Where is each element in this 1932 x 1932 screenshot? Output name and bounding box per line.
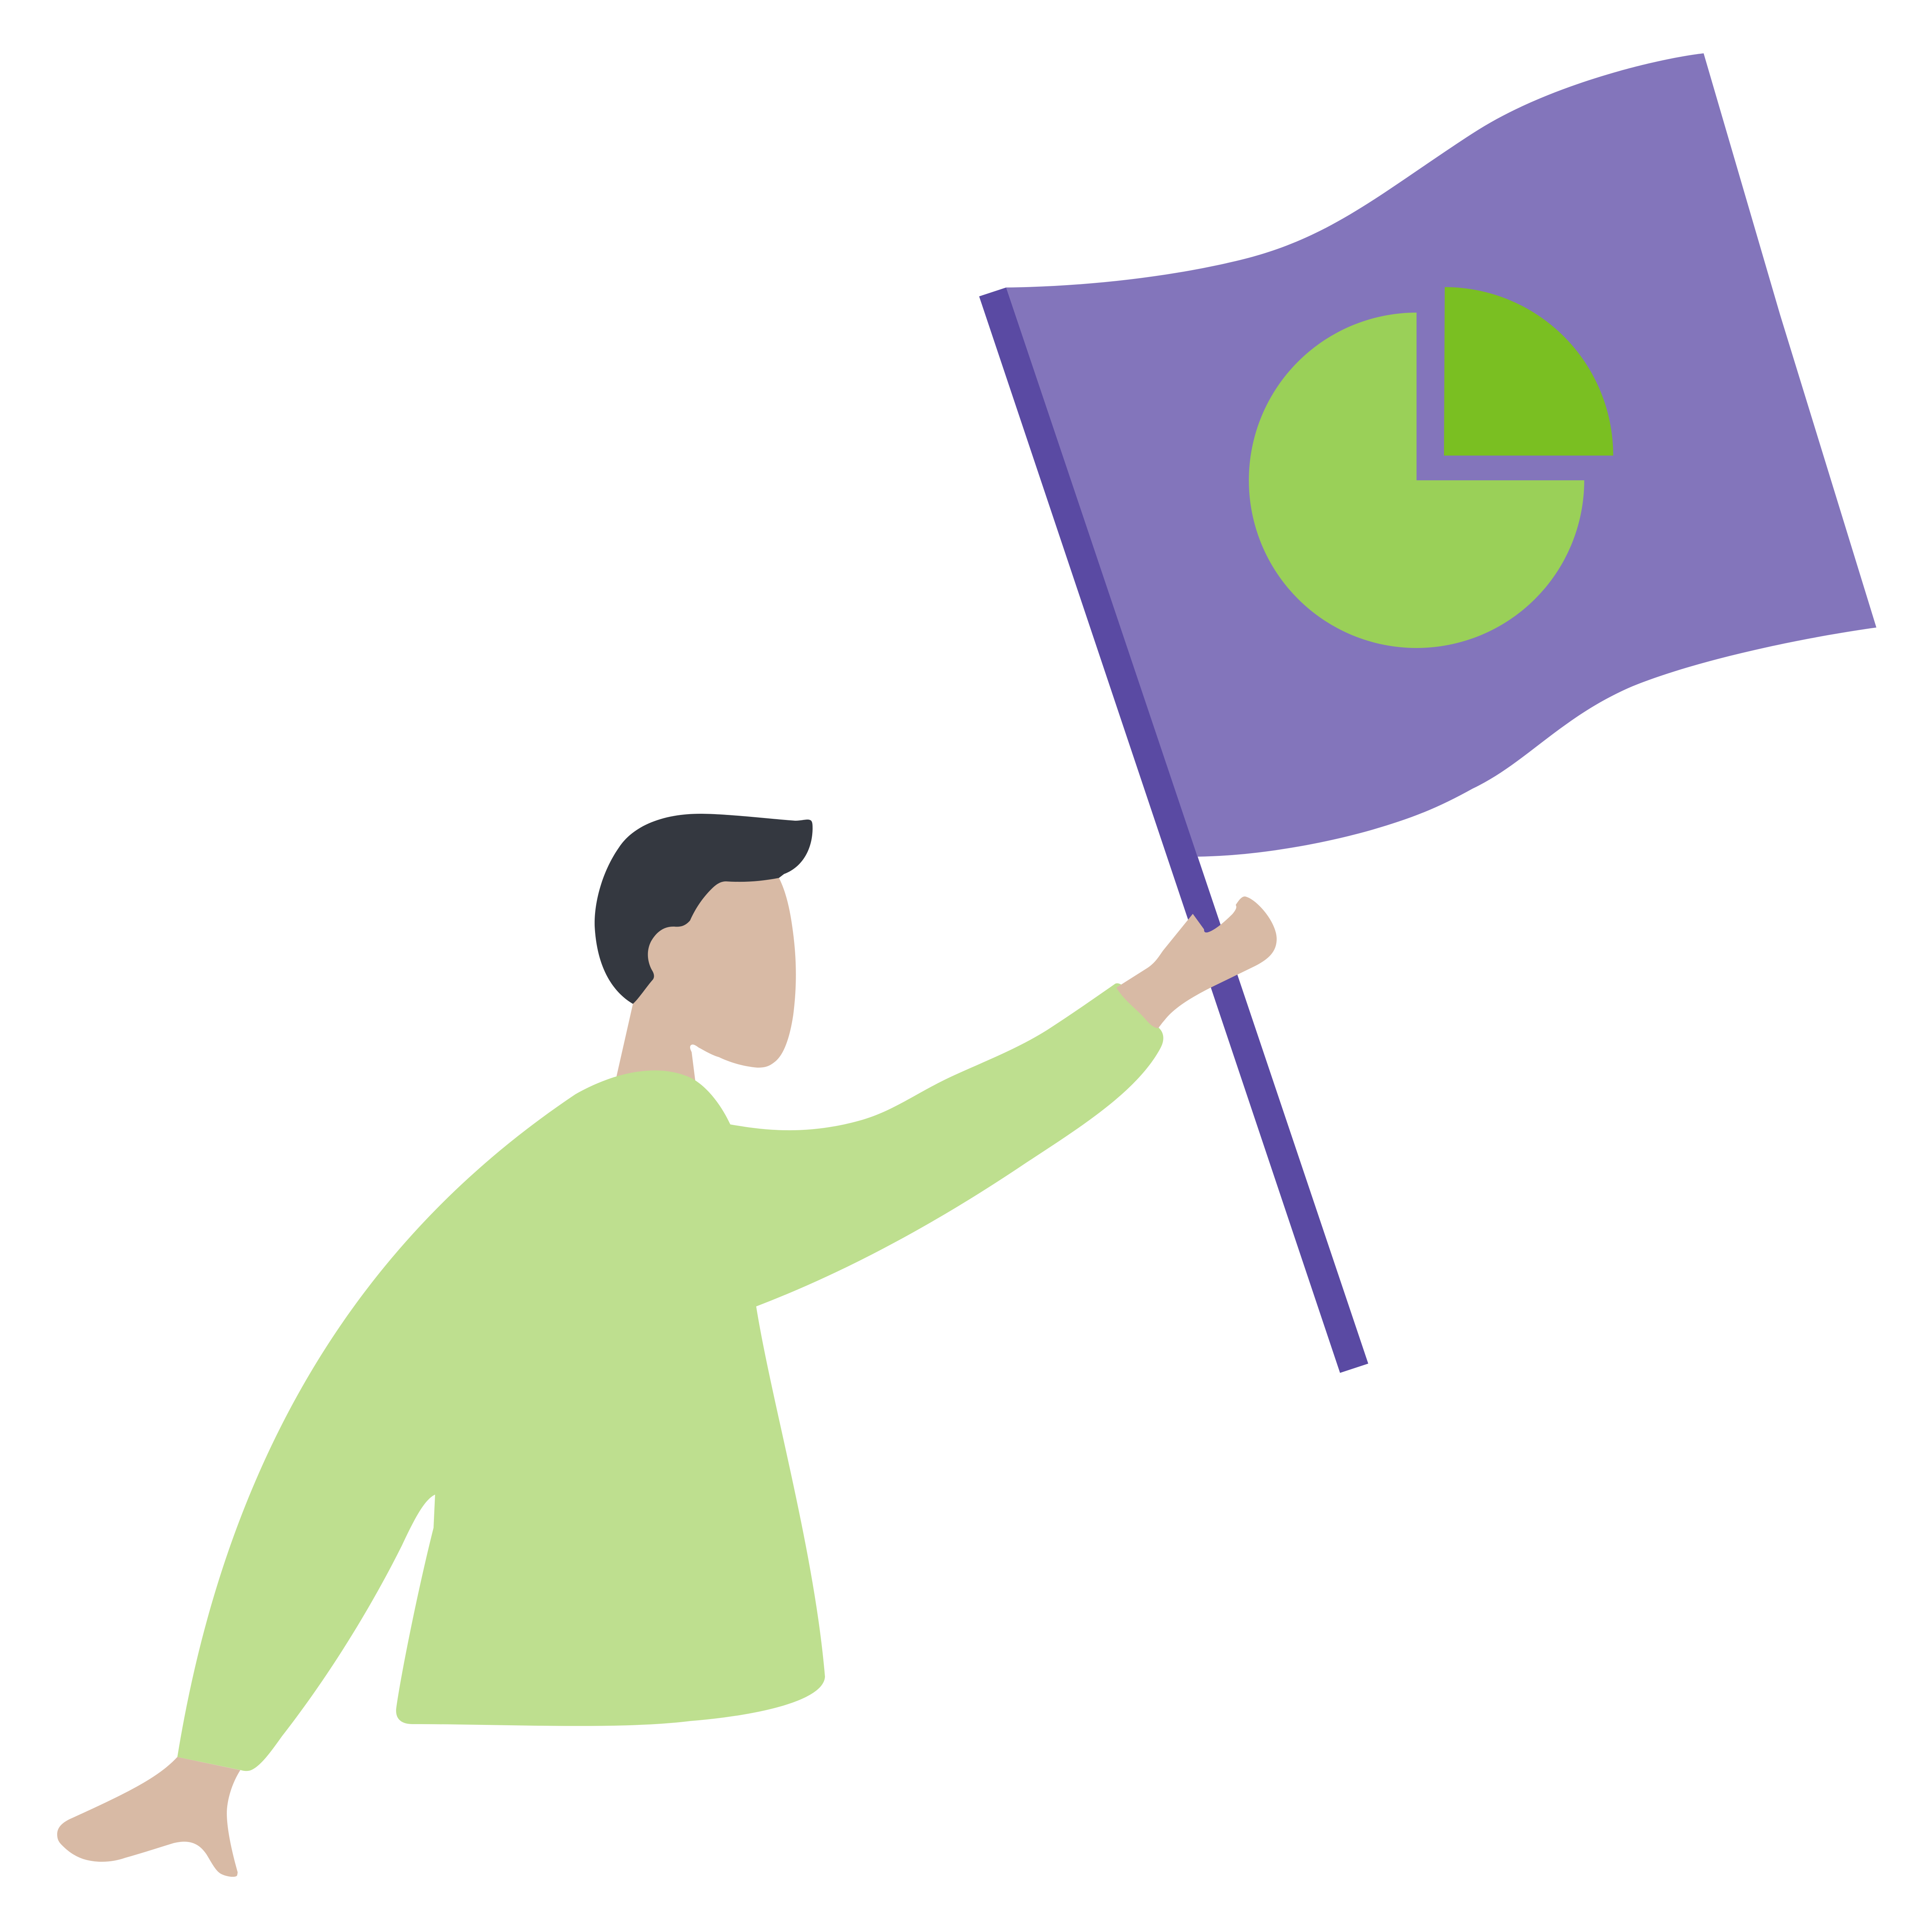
foot [57, 1757, 240, 1877]
flag pole [979, 287, 1368, 1373]
hair [595, 814, 813, 1004]
flag cloth [1006, 53, 1876, 857]
shirt [177, 983, 1163, 1771]
pie chart icon [1249, 287, 1613, 648]
pie chart: large light green slice [1249, 313, 1584, 648]
hand [1116, 896, 1277, 1028]
neck and face [614, 878, 796, 1086]
pie chart: dark green quarter slice [1444, 287, 1613, 456]
person [57, 814, 1277, 1877]
